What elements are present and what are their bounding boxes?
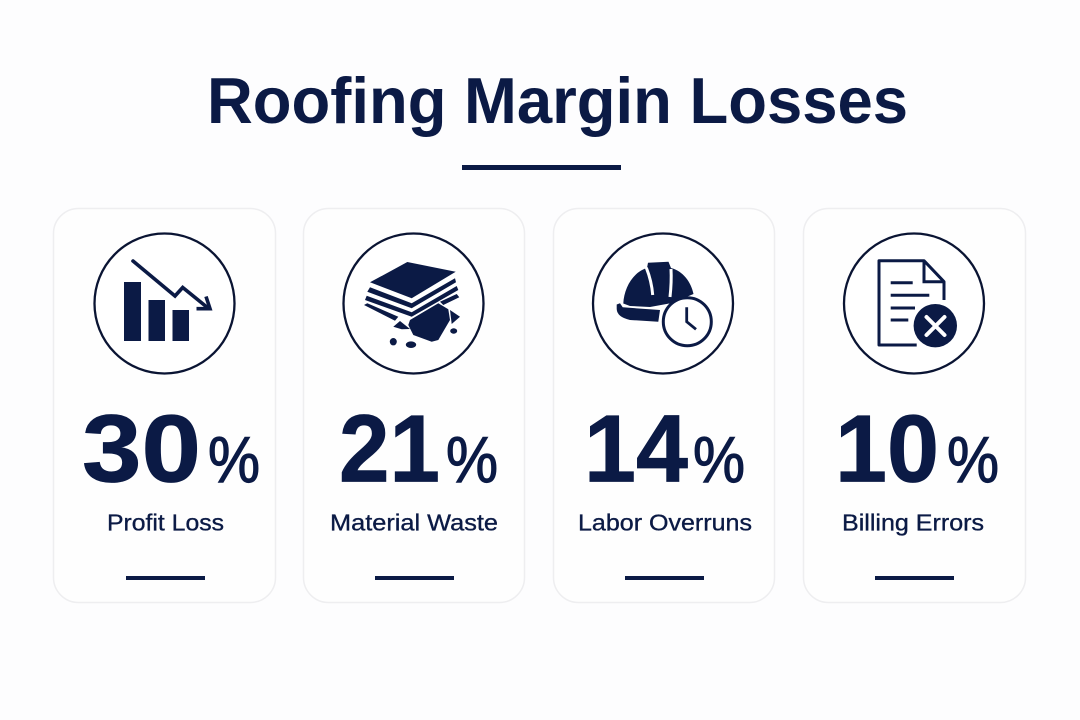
icon: falling bar chart xyxy=(94,234,234,374)
icon: hard hat with clock xyxy=(593,234,733,374)
label: Material Waste xyxy=(330,510,498,536)
percent sign: % xyxy=(947,423,999,496)
title: Roofing Margin Losses xyxy=(207,64,908,137)
card rule xyxy=(375,576,454,580)
card rule xyxy=(625,576,704,580)
panel: material waste xyxy=(304,208,524,602)
label: Labor Overruns xyxy=(578,510,752,536)
title underline xyxy=(462,165,621,170)
panel: labor overruns xyxy=(554,208,774,602)
card rule xyxy=(126,576,205,580)
icon: stacked sheets with rubble xyxy=(344,234,484,374)
icon: document with error mark xyxy=(844,234,984,374)
percent sign: % xyxy=(693,423,745,496)
percent sign: % xyxy=(208,423,260,496)
stat: 14 percent: 14 xyxy=(584,396,688,502)
stat: 30 percent: 30 xyxy=(82,396,201,502)
label: Billing Errors xyxy=(842,510,984,536)
stat: 21 percent: 21 xyxy=(339,396,440,502)
panel: billing errors xyxy=(804,208,1026,602)
label: Profit Loss xyxy=(107,510,224,536)
percent sign: % xyxy=(446,423,498,496)
panel: profit loss xyxy=(54,208,276,602)
card rule xyxy=(875,576,954,580)
stat: 10 percent: 10 xyxy=(835,396,939,502)
